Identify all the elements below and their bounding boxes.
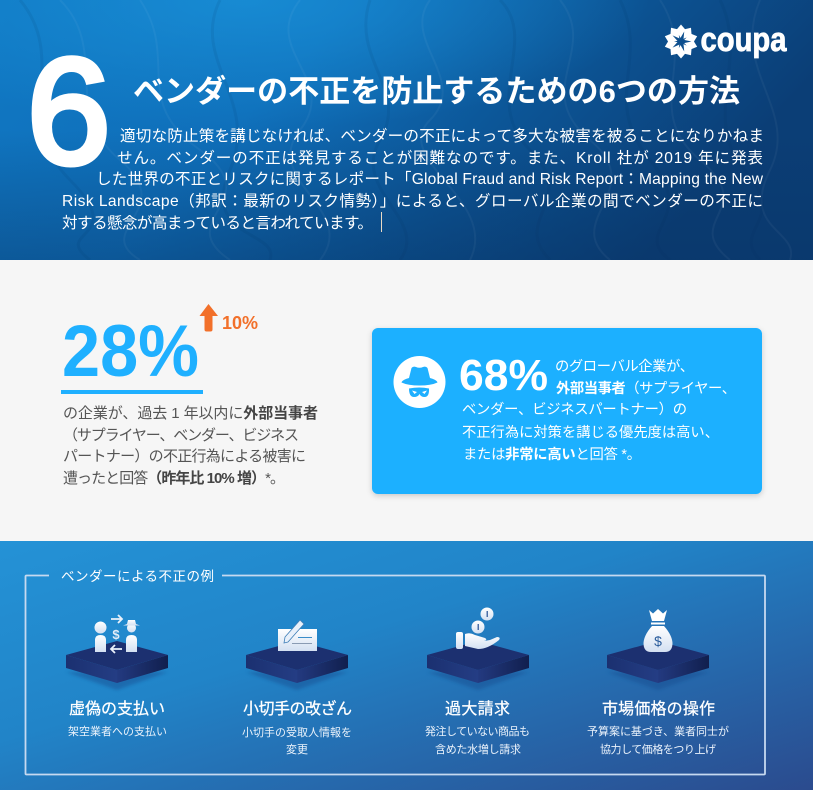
big number 68%: 68%: [459, 351, 548, 400]
icon: coupa starburst: [663, 24, 699, 59]
platform: [427, 641, 529, 690]
callout text: のグローバル企業が、: [555, 358, 694, 375]
item description: 架空業者への支払い: [68, 724, 167, 738]
item: overbilling: [425, 608, 530, 756]
callout text: 外部当事者（サプライヤー、: [556, 379, 736, 397]
callout text: 不正行為に対策を講じる優先度は高い、: [462, 424, 719, 441]
item: false payment: [66, 615, 168, 738]
stat: 28 percent: [61, 304, 318, 487]
stat description: [63, 404, 318, 487]
item: market price manipulation: [587, 609, 729, 756]
icon: masked fraudster: [394, 356, 446, 408]
icon: hand with coins: [456, 608, 500, 649]
callout text: ベンダー、ビジネスパートナー）の: [462, 401, 687, 418]
title: ベンダーの不正を防止するための6つの方法: [133, 74, 740, 109]
platform: [607, 641, 709, 690]
panel: vendor fraud examples: [0, 541, 813, 790]
item title: 市場価格の操作: [602, 700, 715, 718]
stat description: パートナー）の不正行為による被害に: [63, 448, 306, 465]
header intro paragraph: [62, 127, 764, 232]
header intro paragraph: 適切な防止策を講じなければ、ベンダーの不正によって多大な被害を被ることになりかねま: [120, 127, 764, 145]
logo: coupa: [663, 21, 787, 59]
item: market price manipulation: 協力して価格をつり上げ: [600, 742, 716, 756]
stat description: （サプライヤー、ベンダー、ビジネス: [63, 427, 299, 444]
item description: 予算案に基づき、業者同士が: [587, 724, 729, 738]
panel: statistics band: [0, 260, 813, 541]
logo wordmark: coupa: [700, 21, 787, 59]
item description: 発注していない商品も: [425, 724, 530, 738]
underline: [61, 390, 203, 394]
icon: payer and fraudster: $: [112, 627, 120, 642]
item title: 虚偽の支払い: [69, 700, 165, 718]
callout text: [462, 358, 736, 463]
big number 28%: 28%: [62, 311, 199, 392]
section heading: ベンダーによる不正の例: [61, 569, 214, 584]
platform: [66, 641, 168, 690]
item title: 過大請求: [445, 700, 510, 718]
icon: check and pen: [278, 620, 317, 651]
platform: [246, 641, 348, 690]
icon: money bag: [644, 609, 672, 652]
item description: 小切手の受取人情報を: [242, 725, 352, 739]
increase label: 10%: [222, 313, 258, 333]
item title: 小切手の改ざん: [243, 699, 352, 718]
frame: [26, 576, 765, 774]
header intro paragraph: Risk Landscape（邦訳：最新のリスク情勢）」によると、グローバル企業の間でベンダーの不正に: [62, 192, 763, 210]
header intro paragraph: 対する懸念が高まっていると言われています。: [62, 214, 373, 232]
panel: header banner: [0, 0, 813, 260]
item: overbilling: 含めた水増し請求: [435, 742, 521, 756]
panel: 68 percent callout card: [372, 328, 762, 494]
item: check tampering: 変更: [286, 743, 308, 756]
stat description: の企業が、過去 1 年以内に外部当事者: [63, 404, 318, 422]
header intro paragraph: せん。ベンダーの不正は発見することが困難なのです。また、Kroll 社が 2019 年に発表: [117, 149, 763, 167]
icon: up arrow: [200, 304, 218, 332]
item: check tampering: [242, 620, 352, 756]
stat description: 遭ったと回答（昨年比 10% 増）*。: [63, 469, 285, 487]
big numeral 6: 6: [27, 27, 110, 195]
callout text: または非常に高いと回答 *。: [463, 446, 641, 463]
icon: money bag: $: [654, 633, 662, 649]
header intro paragraph: した世界の不正とリスクに関するレポート「Global Fraud and Risk Report：Mapping the New: [96, 170, 764, 188]
